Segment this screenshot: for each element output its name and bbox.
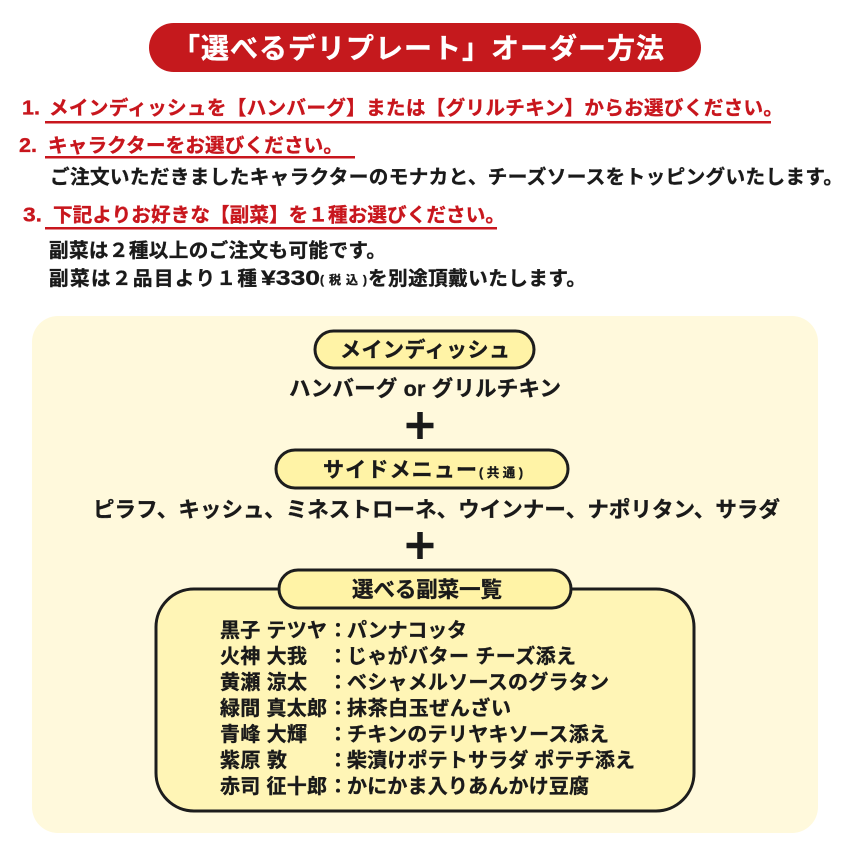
selectable side dish label: 選べる副菜一覧 <box>352 578 502 602</box>
character and side dish list: ： <box>328 672 348 694</box>
character and side dish list: 黒子 テツヤ <box>220 620 327 642</box>
character and side dish list: ： <box>328 698 348 720</box>
character and side dish list: 紫原 敦 <box>220 749 287 772</box>
step 3 note: (税込) <box>320 272 367 287</box>
step 3 note: ¥330 <box>261 267 320 290</box>
character and side dish list: 黄瀬 涼太 <box>220 671 307 694</box>
step 3: 下記よりお好きな【副菜】を１種お選びください。 <box>53 204 505 226</box>
step 2: 2. <box>19 134 37 157</box>
step 3 note: 副菜は２種以上のご注文も可能です。 <box>49 239 386 262</box>
icon: plus <box>406 532 434 559</box>
character and side dish list: 抹茶白玉ぜんざい <box>347 696 511 720</box>
character and side dish list: かにかま入りあんかけ豆腐 <box>347 775 589 798</box>
step 2: キャラクターをお選びください。 <box>48 135 343 157</box>
step 3 note: 副菜は２品目より１種 <box>49 268 257 290</box>
panel: menu composition <box>32 316 818 833</box>
step 3 note: を別途頂戴いたします。 <box>368 268 586 290</box>
character and side dish list: ベシャメルソースのグラタン <box>347 670 609 694</box>
character and side dish list: チキンのテリヤキソース添え <box>347 723 609 746</box>
step 2 note: ご注文いただきましたキャラクターのモナカと、チーズソースをトッピングいたします。 <box>50 166 843 188</box>
side menu options: ピラフ、キッシュ、ミネストローネ、ウインナー、ナポリタン、サラダ <box>93 497 780 522</box>
step 1: メインディッシュを【ハンバーグ】または【グリルチキン】からお選びください。 <box>49 96 783 120</box>
side menu label: (共通) <box>479 465 523 480</box>
title banner <box>149 23 701 72</box>
main dish label <box>315 331 534 368</box>
character and side dish list: 緑間 真太郎 <box>220 697 327 720</box>
selectable side dish box <box>156 570 694 811</box>
side menu label <box>276 450 568 488</box>
character and side dish list: 柴漬けポテトサラダ ポテチ添え <box>347 748 635 772</box>
main dish label: メインディッシュ <box>340 338 510 362</box>
character and side dish list: ： <box>328 620 348 642</box>
selectable side dish label <box>279 570 571 608</box>
step 3: 3. <box>23 204 42 226</box>
character and side dish list: 青峰 大輝 <box>220 723 307 746</box>
character and side dish list: ： <box>328 776 348 798</box>
character and side dish list: ： <box>328 750 348 772</box>
side menu label: サイドメニュー <box>323 459 477 482</box>
character and side dish list: ： <box>328 724 348 746</box>
character and side dish list: ： <box>328 646 348 668</box>
character and side dish list: じゃがバター チーズ添え <box>347 644 576 668</box>
icon: plus <box>406 412 434 439</box>
step 3 note <box>49 239 586 290</box>
title banner: 「選べるデリプレート」オーダー方法 <box>172 32 664 64</box>
character and side dish list: 赤司 征十郎 <box>220 775 327 798</box>
character and side dish list: 火神 大我 <box>220 645 307 668</box>
character and side dish list: パンナコッタ <box>347 619 467 642</box>
main dish options: ハンバーグ or グリルチキン <box>289 376 561 401</box>
character and side dish list <box>220 619 635 798</box>
step 1: 1. <box>22 96 40 120</box>
